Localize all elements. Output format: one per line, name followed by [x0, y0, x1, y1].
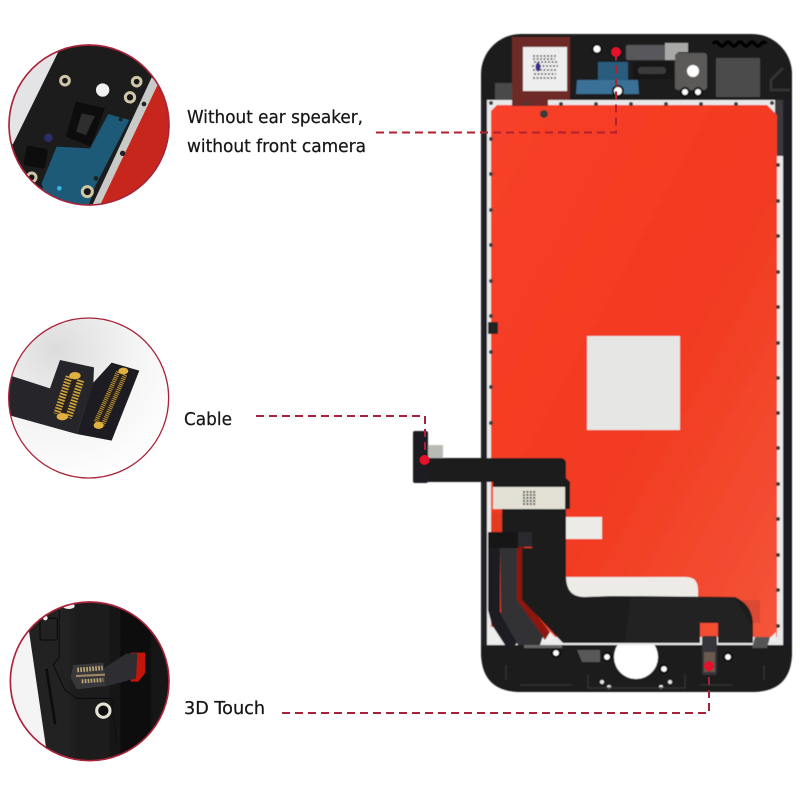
callout line: 3D touch: [282, 668, 709, 713]
left comb centre: [63, 378, 75, 416]
small blue dot lens: [44, 133, 53, 142]
cable label code: [523, 492, 536, 504]
light background: [12, 318, 148, 442]
blue shield lower: [576, 80, 639, 94]
dark grey plate with hole: [675, 53, 707, 90]
band connector: [488, 532, 519, 548]
callout dot: ear speaker: [611, 47, 621, 57]
right grey plate: [716, 58, 760, 97]
bottom connector tab: [702, 636, 717, 675]
callout line: ear speaker: [376, 55, 616, 132]
white wedge beside bands: [540, 626, 556, 642]
left frame edge: [481, 100, 487, 645]
left gold comb: [63, 378, 75, 416]
ear speaker grille: [638, 67, 666, 74]
bottom connector face: [704, 652, 715, 672]
QR label: [523, 47, 567, 91]
circle photo: [12, 602, 168, 760]
cable white tab: [428, 445, 443, 458]
camera hole: [687, 65, 699, 77]
perimeter dots: [489, 101, 780, 628]
silver strip: [92, 77, 158, 207]
connector body: [71, 663, 106, 689]
label purple mark: [536, 62, 540, 72]
phone screen assembly: [413, 34, 792, 692]
white lower label: [560, 577, 698, 600]
thin red stripe beside bands: [516, 545, 550, 640]
red under outer band: [497, 617, 515, 640]
gold end caps: [57, 368, 128, 429]
outer flex band: [488, 545, 520, 645]
right connector flex: [77, 363, 139, 441]
wavy top-right detail: [713, 42, 766, 46]
white cable label: [493, 487, 565, 509]
circle photo: [10, 46, 168, 204]
white corner right: [768, 632, 776, 642]
screw: [97, 704, 110, 717]
left rectangular hole: [23, 145, 48, 169]
grey tab right: [752, 637, 770, 648]
label: 3D touch: 3D Touch: [184, 699, 265, 719]
cable connector head: [413, 431, 428, 483]
line one: Without ear speaker,: [187, 108, 363, 128]
line two: without front camera: [187, 137, 366, 157]
left notch tab: [488, 322, 498, 334]
inner flex band: [500, 545, 543, 645]
cyan dot: [57, 186, 62, 191]
connector middle bar: [76, 675, 105, 676]
right dark rail top: [775, 100, 785, 156]
phone black frame: [481, 34, 792, 692]
label paper: [523, 47, 567, 91]
connector pins lower: [82, 680, 103, 681]
right comb centre: [99, 373, 122, 423]
red protective film: [491, 105, 777, 637]
white small rectangle: [560, 517, 602, 539]
raised plate outline: [53, 610, 117, 743]
red ring: [10, 602, 169, 761]
connector pins: [77, 668, 103, 670]
detail circle: 3D touch connector: [10, 590, 170, 763]
slit: [47, 670, 55, 723]
red film: [100, 85, 168, 204]
black frame: [12, 46, 154, 204]
red ring: [9, 45, 169, 205]
red ring: [9, 318, 169, 478]
bottom black bar: [481, 645, 792, 692]
silver background: [10, 52, 58, 144]
hole: [96, 83, 109, 97]
small recess: [40, 618, 57, 640]
right L-shaped groove: [771, 68, 790, 90]
grey strip under bands: [524, 645, 562, 648]
bottom slits: [506, 665, 764, 688]
strip dots: [94, 102, 146, 181]
flex strip: [103, 653, 137, 687]
cable sheen: [625, 598, 752, 642]
home button cutout: [613, 644, 659, 680]
right gold comb: [99, 373, 122, 423]
main flex cable: [427, 458, 753, 643]
blue shield: [42, 114, 129, 207]
ear speaker slot: [633, 62, 673, 79]
white inner strip: [486, 100, 784, 645]
left connector flex: [8, 360, 94, 434]
blue shield upper: [598, 62, 628, 81]
red notch patch above bands: [491, 513, 502, 532]
ear bracket grey plate: [626, 45, 666, 60]
bottom screws: [552, 649, 732, 673]
label: cable: Cable: [184, 410, 232, 430]
label code: [532, 56, 558, 78]
circle photo: [9, 318, 148, 442]
white centre square: [587, 336, 680, 430]
callout line: cable: [256, 416, 425, 458]
detail circle: cable connectors: [8, 318, 169, 478]
right frame edge: [783, 100, 792, 645]
band connector tip: [518, 532, 532, 547]
darker square on film: [743, 600, 760, 623]
screws: [27, 76, 141, 197]
callout dot: 3D touch: [704, 661, 714, 671]
brown film tab over top bar: [512, 37, 570, 106]
white background: [12, 632, 46, 746]
callout dot: cable: [420, 455, 430, 465]
bottom small white marks: [600, 680, 672, 689]
speaker grille: [76, 113, 95, 135]
top screws: [592, 44, 702, 96]
speaker recess: [66, 102, 105, 147]
detail circle: ear speaker area: [7, 40, 173, 210]
white marks: [43, 603, 75, 620]
red notch: [131, 653, 145, 682]
silver bracket: [665, 43, 688, 60]
left grey plate: [495, 83, 512, 100]
label: ear speaker: [187, 108, 366, 157]
centre grey piece: [577, 650, 600, 662]
white corner left: [488, 627, 500, 643]
black frame: [28, 600, 170, 763]
